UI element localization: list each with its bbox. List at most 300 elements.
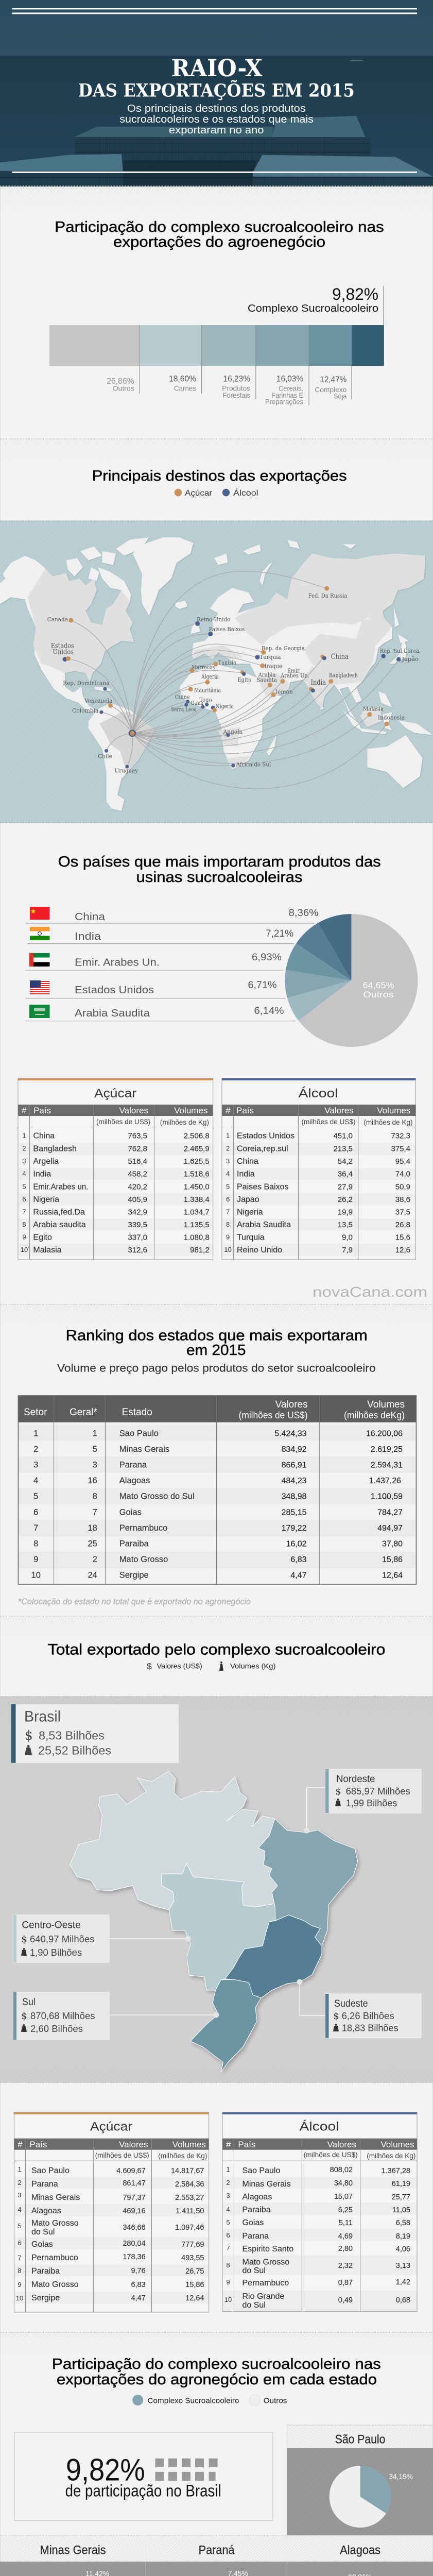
table: álcool estados: País [238,2140,255,2149]
table: álcool países: Reino Unido [237,1246,282,1255]
table: álcool países: 1 [226,1131,230,1140]
table: açúcar países: (milhões de US$) [96,1118,150,1126]
table: álcool países: 36,4 [338,1170,353,1179]
row: Estados Unidos: 6,71% [248,980,277,991]
table: açúcar países: Emir.Arabes un. [33,1183,88,1191]
table: álcool estados: Minas Gerais [242,2180,291,2189]
table: ranking dos estados: Mato Grosso do Sul [119,1492,195,1501]
table: ranking dos estados: 5 [93,1445,97,1454]
table: álcool estados: 1 [226,2165,230,2173]
country labels: Turquia [259,653,281,660]
region: Centro-Oeste [162,1863,276,1990]
card: Centro-Oeste: 640,97 Milhões [30,1934,95,1944]
table: ranking dos estados: 12,64 [382,1571,403,1580]
card: Sul: Sul [22,1997,36,2008]
country labels: Colombia [72,707,99,714]
table: álcool estados: 15,07 [334,2193,353,2201]
legend: valores e volumes: $ [147,1662,152,1671]
table: álcool países: Japao [237,1195,259,1204]
title: DAS EXPORTAÇÕES EM 2015 [78,80,355,101]
country labels: Rep. Dominicana [63,680,110,687]
table: álcool países: País [236,1106,254,1115]
table: álcool países: 451,0 [333,1131,353,1141]
table: ranking dos estados: 2.594,31 [371,1461,403,1469]
pie: Alagoas: Alagoas [340,2543,380,2557]
table: ranking dos estados: Alagoas [119,1476,150,1485]
card: Sudeste [297,1979,421,2038]
table: álcool países: Nigeria [237,1208,263,1217]
table: açúcar países: 2.465,9 [184,1145,210,1153]
label: produtos florestais: Forestais [222,391,250,399]
panel row: Minas, Paraná, Alagoas [0,2535,433,2576]
table: álcool países: 9 [226,1233,230,1241]
table: açúcar estados: 8 [18,2267,22,2275]
region: Norte [70,1771,278,1910]
panel: São Paulo: 34,15% [389,2472,413,2481]
country labels: Venezuela [84,697,112,704]
table: ranking dos estados: 9 [33,1555,38,1564]
table: álcool estados: Alagoas [242,2193,272,2201]
table: açúcar países: 1.450,0 [184,1183,210,1191]
country labels: Marrocos [192,664,215,671]
table: ranking dos estados: 179,22 [282,1524,307,1533]
pie chart: importers: Outros [363,990,393,999]
table: açúcar países: 9 [22,1233,26,1241]
table: álcool estados: 6 [226,2231,230,2239]
table: ranking dos estados: Sergipe [119,1570,149,1580]
table: açúcar estados: 2.553,27 [175,2194,204,2202]
table: álcool estados: 5 [226,2218,230,2226]
table: açúcar estados: 12,64 [185,2294,204,2302]
row: China [25,908,319,924]
table: álcool países: (milhões de Kg) [363,1118,413,1126]
table: álcool estados: 25,77 [392,2193,410,2201]
label: carnes: Carnes [174,384,196,393]
destination markers [63,586,401,769]
row: Arabia Saudita [25,1006,296,1021]
table: álcool estados: 3 [226,2192,230,2199]
table: álcool estados: 11,05 [392,2206,410,2214]
table: açúcar estados: 14.817,67 [171,2167,204,2175]
table: álcool estados: Valores [327,2140,356,2149]
country labels: Canada [47,616,68,623]
table: álcool estados: 4,69 [338,2232,353,2241]
table: açúcar países: 10 [21,1246,28,1253]
row: Arabia Saudita: 6,14% [254,1006,284,1016]
label: carnes: 18,60% [169,374,196,383]
title: RAIO-X [171,54,263,82]
table: ranking dos estados [18,1396,416,1584]
table: açúcar estados: 4 [18,2206,22,2213]
table: ranking dos estados: 2.619,25 [371,1445,403,1454]
table: açúcar estados [13,2112,209,2312]
table: ranking dos estados: Goias [119,1507,142,1517]
card: 9,82% Brasil [14,2432,273,2520]
table: ranking dos estados: Minas Gerais [119,1445,169,1454]
table: açúcar estados: Alagoas [31,2207,61,2215]
table: açúcar países: 3 [22,1157,26,1165]
table: álcool países: 10 [224,1246,232,1253]
table: ranking dos estados: 8 [33,1539,38,1549]
country labels: Gana [190,699,204,706]
card: Centro-Oeste: Centro-Oeste [22,1920,81,1931]
label: cereais: Farinhas E [271,391,303,399]
country labels: Algeria [201,673,219,680]
table: açúcar estados: Parana [31,2180,58,2189]
table: ranking dos estados: 784,27 [377,1509,403,1517]
table: açúcar países: 5 [22,1183,26,1190]
table: ranking dos estados: 866,91 [282,1461,307,1469]
table: açúcar estados: 15,86 [185,2281,204,2289]
label: complexo soja: 12,47% [320,375,347,384]
table: ranking dos estados: 16.200,06 [366,1429,403,1438]
table: álcool países: 74,0 [395,1170,410,1179]
table: açúcar estados: 4.609,67 [116,2167,146,2175]
icon: ten-block scale [155,2459,218,2481]
table: açúcar países: (milhões de Kg) [160,1118,209,1126]
table: açúcar estados: Mato Grosso [31,2219,79,2228]
export routes [68,571,399,789]
table: açúcar países: 1.518,6 [184,1170,210,1179]
table: ranking dos estados: 285,15 [282,1509,307,1517]
card: Brasil: 25,52 Bilhões [38,1744,111,1757]
country labels: Paises Baixos [209,625,245,633]
map legend: Açúcar [185,489,213,498]
table: ranking dos estados: Setor [24,1407,47,1418]
table: açúcar países: Valores [119,1106,148,1115]
table: ranking dos estados: Parana [119,1460,147,1469]
land masses [0,537,433,811]
pie chart: importers [285,914,418,1047]
table: açúcar estados: 493,55 [181,2254,204,2262]
table: álcool estados: 34,80 [334,2179,353,2188]
table: açúcar estados: 3 [18,2191,22,2199]
table: álcool estados: Goias [242,2218,264,2227]
map legend: Álcool [233,488,258,498]
table: açúcar estados: Sao Paulo [31,2166,70,2175]
table: álcool estados: Paraiba [242,2206,271,2214]
heading: principais destinos: Principais destinos das exportações [92,468,347,484]
table: álcool países: 37,5 [395,1208,410,1217]
row: China: 8,36% [288,908,319,919]
table: ranking dos estados: 484,23 [282,1477,307,1485]
table: açúcar países: 339,5 [128,1221,147,1229]
card: Nordeste: 1,99 Bilhões [346,1798,397,1808]
table: açúcar estados: 178,36 [123,2253,146,2261]
table: açúcar estados: 6 [18,2239,22,2247]
panel: São Paulo: São Paulo [335,2433,385,2446]
table: álcool estados: 2,80 [338,2245,353,2253]
table: álcool países: Arabia Saudita [237,1221,291,1229]
heading: ranking: em 2015 [186,1342,246,1359]
pie: Minas Gerais [40,2543,109,2576]
flag: Saudi Arabia [29,1005,49,1018]
title [78,54,355,101]
table: açúcar países: Egito [33,1233,52,1242]
table: açúcar países: 7 [22,1208,26,1216]
card: Brasil: 8,53 Bilhões [39,1729,105,1742]
table: álcool estados: 2 [226,2179,230,2187]
table: álcool países: 3 [226,1157,230,1165]
table: álcool estados: Parana [242,2232,269,2241]
table: álcool países: 50,9 [395,1183,410,1191]
table: ranking dos estados: 16 [88,1476,97,1485]
table: álcool países: Coreia,rep.sul [237,1145,288,1153]
table: açúcar países: 516,4 [128,1157,147,1166]
table: açúcar estados: 797,37 [123,2194,146,2202]
importers list [25,907,319,1021]
table: álcool estados: 4,06 [396,2245,410,2253]
heading: participação por estado: exportações do agronegócio em cada estado [57,2371,377,2388]
table: açúcar estados: Mato Grosso [31,2280,79,2289]
table: álcool estados: 1,42 [396,2278,410,2286]
label: complexo soja [315,375,347,400]
table: álcool estados: Pernambuco [242,2279,289,2287]
table: álcool países: 26,2 [338,1195,353,1204]
country labels: Saudita [256,676,277,684]
table: açúcar estados: País [29,2140,47,2149]
footnote: ranking: *Colocação do estado no total que é exportado no agronegócio [18,1597,251,1606]
card: Sul: 870,68 Milhões [30,2011,95,2021]
table: álcool estados: Volumes [380,2140,414,2149]
row: India: 7,21% [266,928,293,939]
table: álcool estados: 10 [224,2296,232,2303]
table: álcool países [222,1078,415,1260]
table: açúcar estados: Volumes [172,2140,206,2149]
heading: participação por estado [52,2356,381,2388]
country labels: Bangladesh [329,672,358,679]
card: Sudeste: $ [333,2011,339,2022]
table: açúcar estados: 9,76 [131,2267,146,2275]
table: açúcar países [18,1078,213,1260]
card: 9,82% Brasil: de participação no Brasil [65,2482,221,2500]
row: Estados Unidos: Estados Unidos [75,985,154,996]
country labels: Iraque [264,663,282,670]
table: ranking dos estados: 16,02 [286,1539,307,1549]
table: ranking dos estados: 37,80 [382,1539,403,1549]
table: ranking dos estados: 2 [33,1445,38,1454]
subtitle: exportaram no ano [169,125,264,136]
label: produtos florestais [222,374,250,399]
table: ranking dos estados: 6,83 [290,1555,307,1564]
legend: valores e volumes: Valores (US$) [157,1662,202,1670]
card: Brasil: $ [25,1728,33,1743]
region: Sudeste [225,1915,322,1998]
map: regions of Brazil [70,1771,358,2072]
country labels: Serra Leoa [171,706,197,713]
table: açúcar estados: 7 [18,2254,22,2262]
table: açúcar países: Bangladesh [33,1145,77,1153]
card: Brasil: Brasil [24,1708,61,1725]
table: açúcar estados: 1 [18,2165,22,2173]
card: 9,82% Brasil: 9,82% [66,2453,145,2487]
region: Nordeste [258,1819,358,1946]
table: álcool países: 12,6 [395,1246,410,1255]
label: cereais: Cereais, [279,384,303,393]
table: álcool países: Turquia [237,1233,265,1242]
country labels: Egito [237,676,251,683]
table: álcool estados: 8,19 [396,2232,410,2241]
card: Sudeste: 6,26 Bilhões [342,2011,394,2021]
pie: Paraná: Paraná [199,2543,235,2557]
table: açúcar estados: 1.411,50 [176,2207,204,2215]
table: açúcar estados: 1.097,46 [175,2224,204,2232]
card: Sul: $ [21,2011,27,2022]
label: cereais [265,374,303,405]
country labels: Emir. [287,667,301,674]
table: açúcar países: País [33,1106,51,1115]
table: açúcar países: 1 [22,1131,26,1140]
table: álcool estados: 7 [226,2244,230,2252]
row: India: India [75,931,101,942]
subtitle [119,103,314,136]
country labels: Fed. Da Russia [308,592,348,599]
table: álcool países: # [226,1106,231,1115]
value: 9,82% [248,285,378,314]
table: álcool países: 7,9 [342,1246,353,1255]
table: açúcar países: 1.135,5 [184,1221,210,1229]
legend: valores e volumes [147,1662,275,1671]
panel: São Paulo [287,2425,433,2535]
table: álcool países: 27,9 [338,1183,353,1191]
table: açúcar países: Açúcar [94,1087,136,1100]
table: álcool países: 4 [226,1170,230,1178]
country labels: Rep. Sul Corea [380,647,420,654]
heading: participação [55,219,384,250]
card: Centro-Oeste [13,1915,190,1962]
row: Estados Unidos [25,980,285,999]
table: álcool estados: 9 [226,2278,230,2286]
table: álcool estados: Rio Grande [242,2292,284,2301]
table: ranking dos estados: Volumes [367,1399,405,1410]
table: açúcar estados: 2 [18,2179,22,2187]
label: cereais: 16,03% [276,374,303,383]
table: álcool estados: 0,87 [338,2279,353,2287]
table: açúcar países: Russia,fed.Da [33,1208,85,1217]
table: açúcar países: 2.506,8 [184,1131,210,1141]
card: Sudeste: 18,83 Bilhões [342,2023,399,2033]
table: açúcar países: Volumes [174,1106,207,1115]
card: Nordeste: 685,97 Milhões [346,1786,410,1797]
table: açúcar países: 337,0 [128,1233,147,1242]
card: Nordeste: Nordeste [336,1774,375,1785]
label: outros [107,376,134,393]
country labels: Arabia [258,671,276,679]
table: açúcar estados: (milhões de US$) [95,2151,149,2159]
country labels: Estados [51,642,74,650]
card: Brasil [11,1704,179,1763]
table: ranking dos estados: 5.424,33 [274,1429,307,1438]
table: álcool estados: (milhões de US$) [304,2151,358,2159]
table: açúcar estados: 6,83 [131,2281,146,2289]
card: Sul [13,1992,219,2040]
table: açúcar estados: 2.584,36 [175,2180,204,2189]
table: açúcar estados: 346,66 [123,2224,146,2232]
table: ranking dos estados: 2 [93,1555,97,1564]
stacked bar: participação nas exportações [49,285,384,405]
card: Sudeste: Sudeste [334,1998,368,2009]
table: álcool estados: 8 [226,2261,230,2269]
table: açúcar países: India [33,1170,51,1179]
table: álcool estados: do Sul [242,2301,266,2310]
table: ranking dos estados: Mato Grosso [119,1555,168,1564]
map legend [175,488,258,498]
row: Emirados: 6,93% [252,952,282,963]
pie: Alagoas [330,2543,391,2576]
table: álcool países: 7 [226,1208,230,1216]
table: ranking dos estados: 5 [33,1492,38,1501]
table: açúcar países: 1.338,4 [184,1195,210,1204]
table: ranking dos estados: Geral* [70,1407,97,1418]
table: açúcar estados: Goias [31,2240,53,2249]
table: álcool estados: 1.367,28 [382,2167,410,2175]
panel: world map [0,521,433,823]
country labels: Angola [223,728,243,735]
table: açúcar países: 6 [22,1195,26,1203]
table: ranking dos estados: 4 [33,1476,38,1485]
table: álcool países: 5 [226,1183,230,1190]
table: álcool países: Valores [324,1106,354,1115]
table: ranking dos estados: 24 [88,1570,97,1580]
table: açúcar países: 458,2 [128,1170,147,1179]
table: ranking dos estados: 494,97 [377,1524,403,1533]
table: álcool países: 95,4 [395,1157,410,1166]
row: Arabia Saudita: Arabia Saudita [75,1008,150,1019]
table: ranking dos estados: Paraiba [119,1539,149,1549]
subtitle: sucroalcooleiros e os estados que mais [119,114,314,125]
table: açúcar países: Nigeria [33,1195,59,1204]
country labels: Reino Unido [197,616,230,623]
table: açúcar países: 1.625,5 [184,1157,210,1166]
table: açúcar países: Malasia [33,1246,62,1255]
flag: UAE [29,953,49,967]
label: complexo soja: Soja [334,392,347,400]
table: ranking dos estados: 3 [33,1460,38,1469]
country labels: India [311,679,326,687]
country labels: Tunisia [218,659,236,666]
value: 9,82%: 9,82% [332,285,378,303]
table: açúcar estados: Açúcar [90,2120,132,2134]
card: Centro-Oeste: 1,90 Bilhões [30,1947,82,1958]
table: álcool estados: Álcool [300,2120,339,2134]
heading: total exportado: Total exportado pelo complexo sucroalcooleiro [48,1641,385,1658]
table: álcool países: Volumes [377,1106,410,1115]
table: álcool estados: 6,25 [338,2206,353,2214]
table: ranking dos estados: 7 [93,1507,97,1517]
table: álcool estados [222,2112,417,2312]
table: açúcar países: 405,9 [128,1195,147,1204]
table: ranking dos estados: Estado [122,1407,152,1418]
table: ranking dos estados: Valores [275,1399,308,1410]
country labels: Togo [199,696,212,703]
table: açúcar estados: do Sul [31,2228,55,2236]
card: Nordeste [304,1769,421,1833]
table: ranking dos estados: 10 [31,1570,41,1580]
table: ranking dos estados: 1 [33,1429,38,1438]
table: ranking dos estados: 1 [93,1429,97,1438]
subheading: ranking: Volume e preço pago pelos produtos do setor sucroalcooleiro [57,1363,376,1375]
table: ranking dos estados: 1.437,26 [369,1477,401,1485]
pie chart: importers: 64,65% [362,980,394,990]
heading: ranking: Ranking dos estados que mais exportaram [66,1328,368,1344]
table: açúcar estados: 26,75 [185,2267,204,2276]
flag: China [30,907,49,920]
table: açúcar países: 312,6 [128,1246,147,1255]
table: álcool países: 8 [226,1221,230,1228]
panel: Brazil map [0,1697,433,2082]
table: álcool estados: 808,02 [330,2166,353,2174]
table: açúcar estados: 9 [18,2281,22,2289]
